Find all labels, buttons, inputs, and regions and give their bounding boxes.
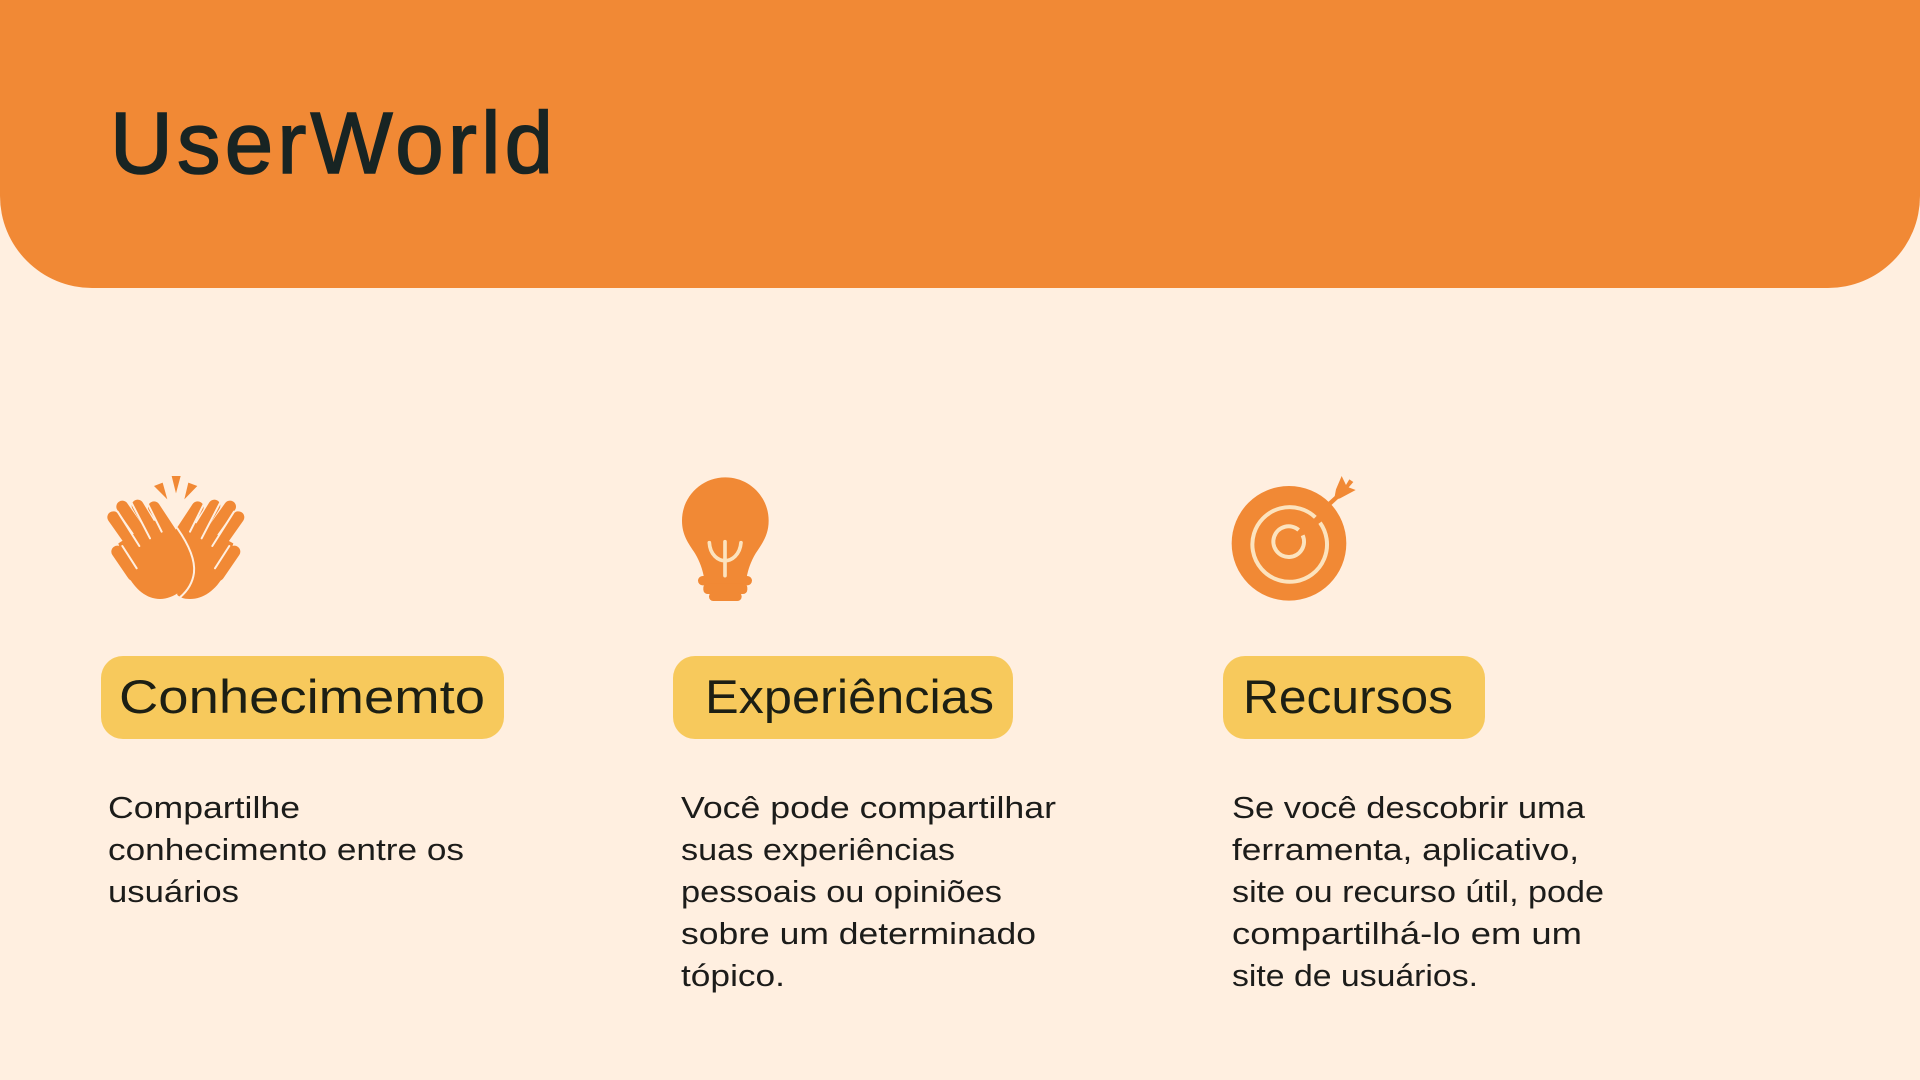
heading pill: Experiências — [673, 656, 1013, 739]
heading pill: Recursos — [1223, 656, 1485, 739]
heading pill: Experiências: Experiências — [705, 670, 994, 723]
text block: recursos: Se você descobrir uma — [1232, 790, 1586, 825]
text block: recursos — [1232, 790, 1604, 993]
icon: light bulb — [682, 477, 769, 601]
header band — [0, 0, 1920, 288]
text block: experiencias: Você pode compartilhar — [681, 790, 1056, 825]
text block: conhecimento: usuários — [108, 874, 239, 909]
heading pill: Conhecimemto: Conhecimemto — [119, 670, 485, 723]
heading pill: Conhecimemto — [101, 656, 504, 739]
text block: recursos: ferramenta, aplicativo, — [1232, 832, 1579, 867]
panel: conhecimento — [101, 476, 504, 909]
text block: recursos: compartilhá-lo em um — [1232, 916, 1582, 951]
heading pill: Recursos: Recursos — [1243, 670, 1453, 723]
text block: recursos: site de usuários. — [1232, 958, 1478, 993]
text block: recursos: site ou recurso útil, pode — [1232, 874, 1604, 909]
text block: experiencias: pessoais ou opiniões — [681, 874, 1002, 909]
text block: conhecimento: Compartilhe — [108, 790, 300, 825]
panel: recursos — [1223, 476, 1604, 993]
text block: conhecimento — [108, 790, 464, 909]
text block: experiencias — [681, 790, 1056, 993]
text block: conhecimento: conhecimento entre os — [108, 832, 464, 867]
text block: experiencias: suas experiências — [681, 832, 955, 867]
icon: high five hands — [113, 476, 238, 599]
title: UserWorld — [110, 95, 553, 192]
icon: target with dart — [1232, 476, 1356, 601]
panel: experiencias — [673, 477, 1056, 993]
text block: experiencias: sobre um determinado — [681, 916, 1036, 951]
text block: experiencias: tópico. — [681, 958, 785, 993]
